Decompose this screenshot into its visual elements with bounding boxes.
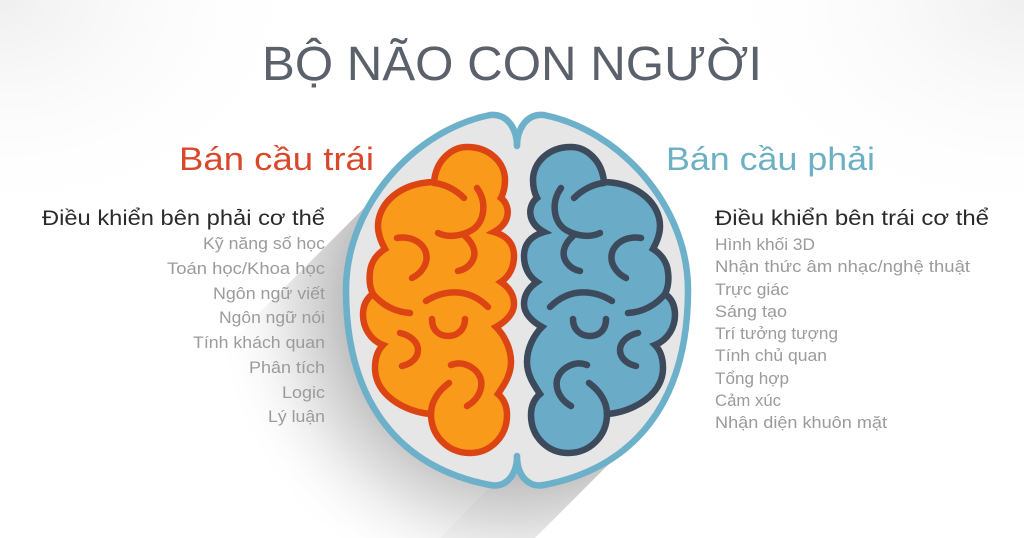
list: right hemisphere skills: Cảm xúc [715,392,781,410]
list: left hemisphere skills: Logic [282,384,325,402]
icon: right brain hemisphere [524,147,675,453]
icon: head outline [346,115,688,485]
list: left hemisphere skills: Phân tích [249,359,325,377]
list: left hemisphere skills: Kỹ năng số học [203,235,325,253]
list: right hemisphere skills: Tổng hợp [715,370,789,388]
list: right hemisphere skills: Tính chủ quan [715,347,827,365]
list: left hemisphere skills: Lý luận [268,408,325,426]
list: right hemisphere skills: Trực giác [715,281,789,299]
list: left hemisphere skills: Ngôn ngữ viết [213,285,325,303]
subheading: controls right side: Điều khiển bên phải cơ thể [42,207,325,230]
list: right hemisphere skills [715,236,970,432]
icon: left brain hemisphere [363,147,514,453]
list: left hemisphere skills: Tính khách quan [193,334,325,352]
heading: left hemisphere: Bán cầu trái [179,141,374,177]
panel: left hemisphere text [42,207,325,426]
subheading: controls left side: Điều khiển bên trái cơ thể [715,207,989,230]
panel: right hemisphere text [715,207,989,432]
list: right hemisphere skills: Trí tưởng tượng [715,325,838,343]
list: right hemisphere skills: Nhận diện khuôn mặt [715,414,887,432]
list: left hemisphere skills: Ngôn ngữ nói [219,309,325,327]
list: right hemisphere skills: Nhận thức âm nhạc/nghệ thuật [715,258,970,276]
heading: right hemisphere: Bán cầu phải [666,141,875,177]
list: left hemisphere skills [167,235,325,426]
list: left hemisphere skills: Toán học/Khoa học [167,260,325,278]
list: right hemisphere skills: Hình khối 3D [715,236,815,254]
list: right hemisphere skills: Sáng tạo [715,303,787,321]
long drop shadow [100,207,650,538]
title: BỘ NÃO CON NGƯỜI [262,37,762,91]
